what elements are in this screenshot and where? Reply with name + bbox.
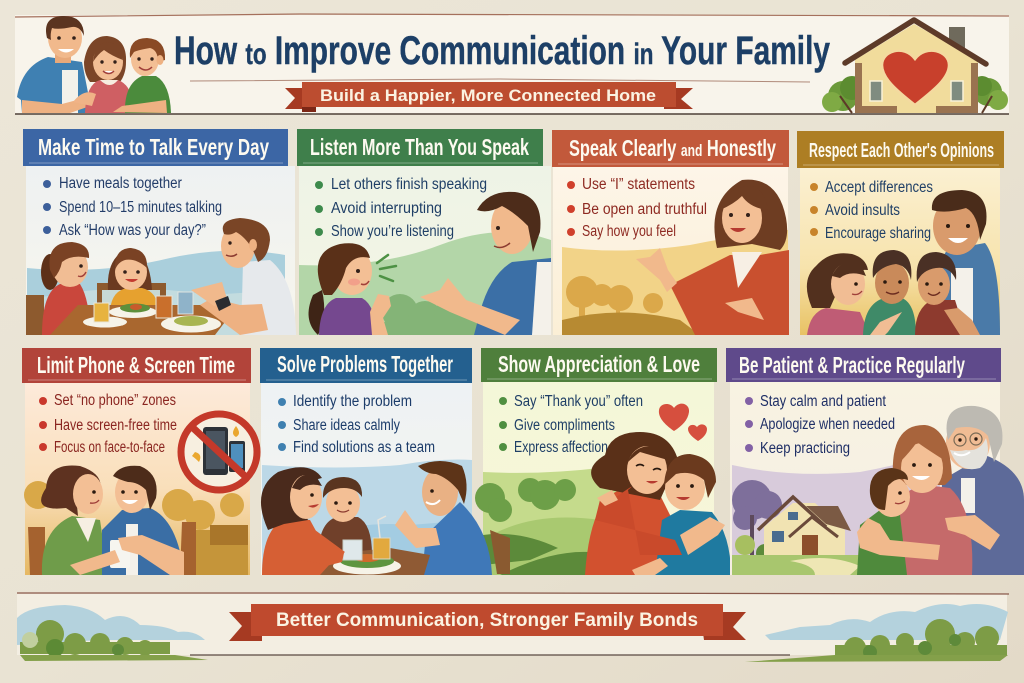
bullet list: Encourage sharing bbox=[825, 225, 931, 242]
panel: speak clearly and honestly bbox=[552, 130, 789, 335]
bullet list bbox=[43, 175, 222, 239]
bullet list: Let others finish speaking bbox=[331, 176, 487, 193]
mom bbox=[84, 36, 133, 113]
bullet list: Have meals together bbox=[59, 175, 182, 192]
panel: listen more than you speak bbox=[297, 129, 551, 335]
header: respect bbox=[797, 131, 1004, 168]
subtitle ribbon: Build a Happier, More Connected Home bbox=[320, 86, 656, 105]
bullet list: Avoid interrupting bbox=[331, 200, 442, 217]
subtitle ribbon bbox=[285, 82, 693, 112]
bullet list bbox=[278, 393, 435, 456]
bullet list: Set “no phone” zones bbox=[54, 392, 176, 409]
bullet list bbox=[810, 179, 933, 242]
icon: hearts bbox=[659, 404, 707, 441]
bullet list: Say how you feel bbox=[582, 223, 676, 240]
header: listen more: Listen More Than You Speak bbox=[310, 134, 529, 160]
bullet list: Keep practicing bbox=[760, 440, 850, 457]
footer ribbon bbox=[229, 604, 746, 641]
dad bbox=[17, 16, 96, 113]
title: How to Improve Communication in Your Family bbox=[174, 29, 831, 73]
header: make time to talk: Make Time to Talk Every Day bbox=[38, 134, 269, 160]
header: show appreciation: Show Appreciation & Love bbox=[498, 351, 700, 377]
panel: show appreciation and love bbox=[475, 348, 731, 575]
boy bbox=[113, 38, 171, 113]
bullet list bbox=[499, 393, 643, 456]
bullet list: Ask “How was your day?” bbox=[59, 222, 206, 239]
scene: girl and father talking bbox=[299, 192, 551, 335]
bullet list bbox=[39, 392, 177, 456]
header: solve problems bbox=[260, 348, 472, 383]
bullet list: Say “Thank you” often bbox=[514, 393, 643, 410]
header: listen more bbox=[297, 129, 543, 166]
header: speak clearly: Speak Clearly and Honestly bbox=[569, 135, 776, 161]
bullet list: Be open and truthful bbox=[582, 201, 707, 218]
bullet list: Give compliments bbox=[514, 417, 615, 434]
bullet list: Express affection bbox=[514, 439, 608, 456]
illustration: right landscape bbox=[745, 604, 1008, 662]
header: solve problems: Solve Problems Together bbox=[277, 351, 453, 377]
header band bbox=[15, 14, 1009, 114]
bullet list: Avoid insults bbox=[825, 202, 900, 219]
header: make time to talk bbox=[23, 129, 288, 166]
bullet list: Show you’re listening bbox=[331, 223, 454, 240]
panel: respect each other's opinions bbox=[797, 131, 1004, 335]
header: limit phone: Limit Phone & Screen Time bbox=[37, 352, 235, 378]
footer ribbon: Better Communication, Stronger Family Bonds bbox=[276, 610, 698, 631]
header: limit phone bbox=[22, 348, 251, 383]
scene: house and three generations bbox=[732, 406, 1024, 575]
scene: woman speaking bbox=[562, 180, 789, 335]
bullet list: Use “I” statements bbox=[582, 176, 695, 193]
bullet list: Share ideas calmly bbox=[293, 417, 400, 434]
scene: couple with cups bbox=[24, 465, 248, 575]
icon: house with heart bbox=[822, 20, 1008, 113]
header: speak clearly bbox=[552, 130, 789, 167]
header: show appreciation bbox=[481, 348, 717, 382]
bullet list bbox=[567, 176, 707, 240]
header: be patient bbox=[726, 348, 1001, 382]
panel: make time to talk every day bbox=[23, 129, 296, 335]
bullet list: Accept differences bbox=[825, 179, 933, 196]
panel: be patient and practice regularly bbox=[726, 348, 1024, 575]
footer band bbox=[17, 593, 1009, 655]
bullet list: Stay calm and patient bbox=[760, 393, 887, 410]
scene: family at table solving problems bbox=[261, 460, 510, 575]
icon: no phones sign bbox=[181, 414, 257, 490]
bullet list: Focus on face-to-face bbox=[54, 439, 165, 456]
bullet list: Apologize when needed bbox=[760, 416, 895, 433]
icon: cottage bbox=[758, 497, 851, 555]
scene: family at table bbox=[26, 218, 296, 335]
bullet list: Identify the problem bbox=[293, 393, 412, 410]
illustration: left landscape bbox=[17, 605, 208, 661]
bullet list bbox=[745, 393, 895, 457]
bullet list: Have screen-free time bbox=[54, 417, 177, 434]
bullet list: Spend 10–15 minutes talking bbox=[59, 199, 222, 216]
panel: solve problems together bbox=[260, 348, 510, 575]
panel: limit phone and screen time bbox=[22, 348, 257, 575]
scene: mother hugging son bbox=[475, 432, 731, 575]
bullet list bbox=[315, 176, 487, 240]
illustration: family in header bbox=[17, 16, 171, 113]
bullet list: Find solutions as a team bbox=[293, 439, 435, 456]
scene: family sharing bbox=[807, 190, 1000, 335]
